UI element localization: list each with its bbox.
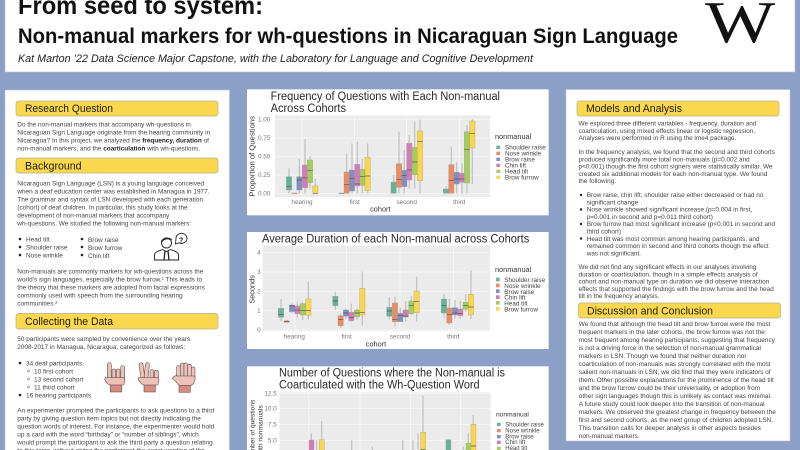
legend: Brow raise (505, 156, 535, 163)
list: findings: significant change (587, 199, 639, 206)
chart title: Frequency of Questions with Each Non-manual (271, 89, 500, 103)
heading: research question (16, 101, 218, 116)
text: discussion (579, 321, 776, 440)
x axis: first (350, 199, 360, 206)
y axis: 4 (257, 249, 261, 256)
text: frequency analysis: the following: (578, 178, 616, 185)
list: non-manual markers: Brow furrow (88, 245, 123, 252)
list: non-manual markers: Shoulder raise (26, 244, 68, 252)
text: interaction effects: cohort and non-manual type on duration we did observe interaction (578, 279, 770, 286)
heading: collecting the data (16, 314, 218, 329)
panel: left column (5, 90, 230, 450)
icon: hand two (138, 362, 159, 392)
icon: hand three (172, 363, 195, 392)
y axis: 1.00 (258, 117, 271, 124)
text: procedure (16, 408, 215, 450)
legend: nonmanual (496, 411, 529, 418)
text: research question: Do the non-manual markers that accompany wh-questions in (17, 122, 191, 128)
text: frequency analysis: created six additional models for each non-manual type. We found (578, 171, 768, 178)
legend (495, 265, 546, 314)
y axis (264, 390, 277, 444)
text: research question: non-manual markers, and the coarticulation with wh-questions. (17, 146, 200, 152)
legend: Chin lift (505, 162, 526, 169)
x axis title: cohort (370, 204, 391, 213)
text: models intro (578, 120, 757, 142)
heading: models and analysis: Models and Analysis (586, 103, 682, 115)
y axis title: Seconds (248, 275, 257, 304)
plot area (275, 115, 490, 197)
chart: frequency boxplot (247, 89, 549, 215)
legend: Chin lift (505, 440, 526, 446)
text: background: when a deaf education center was established in Managua in 1977. (16, 188, 210, 196)
list: non-manual markers: Chin lift (88, 253, 110, 260)
text: interaction effects: tilt in the frequency analysis. (578, 293, 660, 300)
y axis: 1 (257, 308, 261, 315)
x axis: first (342, 333, 352, 340)
text: procedure: would prompt the participant to ask the third party a question relating (16, 440, 213, 446)
y axis title: Proportion of Questions (247, 116, 256, 197)
text: discussion: frequent markers in the later cohorts, the brow furrow was not the (579, 329, 765, 336)
legend: Nose wrinkle (504, 283, 541, 290)
y axis (257, 249, 261, 334)
text: discussion: and the brow furrow could be their universality, or adoption from (579, 385, 760, 392)
chart title (271, 89, 500, 115)
list: non-manual markers: Brow raise (88, 237, 119, 244)
text: discussion: salient non-manuals in LSN, we did find that they were indicators of (579, 369, 771, 376)
text: research question: Nicaraguan Sign Language originate from the hearing community in (17, 130, 211, 136)
legend: Nose wrinkle (505, 150, 542, 157)
panel: right column (566, 90, 790, 441)
text: procedure: party by giving question item topics but not directly indicating the (17, 416, 201, 422)
chart: duration boxplot (247, 231, 549, 349)
x axis (291, 199, 466, 206)
legend (495, 132, 546, 181)
chart title: Across Cohorts (271, 101, 346, 115)
list: participant breakdown: 11 third cohort (34, 384, 75, 392)
legend: Head tilt (505, 168, 528, 175)
legend: Shoulder raise (504, 277, 546, 284)
list: findings: Nose wrinkle showed significant increase (p=0.004 in first, (587, 207, 752, 214)
text: discussion: most frequent among hearing participants, suggesting that frequency (579, 337, 776, 344)
heading: models and analysis (577, 101, 779, 116)
text: discussion: markers in LSN. Though we found that neither duration nor (579, 353, 747, 360)
list: findings: was not significant. (586, 250, 641, 257)
text: background: wh-questions. We studied the following non-manual markers: (16, 220, 191, 228)
legend: Brow furrow (505, 174, 539, 181)
legend: Chin lift (504, 295, 526, 302)
y axis: 2 (257, 288, 261, 295)
text: discussion: This transition calls for deeper analysis in other aspects besides (579, 425, 761, 432)
y axis: 10.0 (264, 406, 277, 413)
y axis: 12.5 (264, 390, 277, 397)
chart title: Average Duration of each Non-manual across Cohorts (262, 231, 529, 245)
y axis: 5.0 (268, 437, 277, 444)
y axis: 0.00 (258, 190, 271, 197)
text: non-manuals: world’s sign languages, especially the brow furrow.¹ This leads to (16, 276, 202, 284)
heading: collecting the data: Collecting the Data (25, 316, 113, 328)
text: non-manuals: Non-manuals are commonly markers for wh-questions across the (17, 268, 204, 276)
plot area (279, 392, 491, 450)
legend: Brow furrow (504, 307, 538, 314)
text: discussion: non-manual markers. (579, 433, 640, 440)
text: frequency analysis (578, 149, 775, 185)
icon: person with question bubble (154, 233, 187, 260)
text: participants: 50 participants were sampled by convenience over the years (17, 336, 190, 343)
chart title: Number of Questions where the Non-manual is (279, 365, 505, 379)
text: discussion: We found that although the head tilt and brow furrow were the most (579, 321, 771, 328)
list: findings: Brow furrow had most significant increase (p<0.001 in second and (587, 221, 776, 228)
list: findings (580, 192, 776, 257)
text: discussion: coarticulation of non-manuals was strongly correlated with the most (579, 361, 771, 368)
x axis: hearing (284, 333, 305, 340)
y axis: 0.25 (258, 172, 271, 179)
subtitle: Non-manual markers for wh-questions in Nicaraguan Sign Language (18, 25, 678, 48)
y axis: 7.5 (268, 421, 277, 428)
text: frequency analysis: In the frequency analysis, we found that the second and third cohorts (578, 149, 775, 156)
icon: person with question bubble: ? (179, 236, 184, 244)
text: discussion: A future study could look deeper into the transition of non-manual (579, 401, 765, 408)
list: non-manual markers (19, 236, 123, 260)
x axis: second (396, 199, 417, 206)
list: findings: Brow raise, chin lift, shoulder raise either decreased or had no (587, 192, 764, 199)
text: models intro: coarticulation, using mixed effects linear or logistic regression. (578, 128, 755, 135)
x axis title: cohort (366, 339, 386, 348)
text: discussion: markers. We observed the greatest change in frequency between the (579, 409, 776, 416)
text: models intro: Analyses were performed in R using the lme4 package. (578, 135, 737, 142)
text: research question (17, 122, 211, 152)
text: models intro: We explored three different variables - frequency, duration and (578, 120, 757, 128)
text: non-manuals: the theory that these markers are adopted from facial expressions (17, 284, 205, 292)
text: interaction effects (578, 264, 774, 300)
heading: research question: Research Question (25, 103, 113, 115)
heading: discussion and conclusion (578, 303, 780, 318)
text: discussion: is not a driving force in the selection of non-manual grammatical (579, 345, 761, 352)
legend: nonmanual (495, 265, 532, 274)
text: background: (cohort) of deaf children. In particular, this study looks at the (17, 204, 188, 212)
x axis: second (390, 333, 411, 340)
text: background: Nicaraguan Sign Language (LSN) is a young language conceived (17, 180, 205, 188)
legend: Shoulder raise (505, 422, 545, 428)
text: research question: Nicaragua? In this project, we analyzed the frequency, duration of (17, 138, 209, 144)
heading: background (16, 158, 218, 173)
list: participant breakdown: 10 first cohort (34, 368, 73, 376)
header banner (5, 0, 795, 72)
list: non-manual markers: Head tilt (26, 236, 50, 244)
author line: Kat Marton ’22 Data Science Major Capstone, with the Laboratory for Language and Cognitive Development (18, 53, 534, 65)
list: participant breakdown (19, 360, 91, 400)
plot area (263, 246, 490, 331)
text: participants: 2008-2017 in Managua, Nicaragua, categorized as follows: (17, 344, 185, 351)
text: frequency analysis: p<0.001) though the first cohort signers were statistically similar. We (578, 164, 773, 171)
y axis title (250, 399, 265, 450)
x axis (284, 333, 460, 340)
text: non-manuals (16, 268, 205, 308)
text: discussion: them. Other possible explanations for the prominence of the head tilt (579, 377, 774, 384)
chart title: Coarticulated with the Wh-Question Word (279, 377, 480, 391)
heading: background: Background (25, 160, 82, 172)
text: background: The grammar and syntax of LSN developed with each generation (17, 196, 203, 204)
legend: nonmanual (495, 132, 532, 141)
x axis: third (453, 199, 466, 206)
text: procedure: question words of interest. For instance, the experimenter would hold (17, 424, 215, 430)
y axis: 0 (257, 327, 261, 334)
text: non-manuals: commonly used with speech from the surrounding hearing (17, 292, 183, 300)
legend: Brow raise (504, 289, 535, 296)
text: background: development of non-manual markers that accompany (17, 212, 170, 220)
text: procedure: An experimenter prompted the participants to ask questions to a third (17, 408, 215, 414)
list: findings: third cohort) (587, 228, 621, 236)
list: participant breakdown: 16 hearing participants (26, 392, 91, 400)
text: background (16, 180, 210, 228)
x axis: hearing (291, 199, 313, 206)
list: findings: Head tilt was most common among hearing participants, and (587, 236, 760, 243)
list: participant breakdown: 13 second cohort (34, 376, 84, 384)
text: discussion: first and second cohorts, as the next group of children adopted LSN. (579, 417, 773, 424)
y axis: 0.50 (258, 153, 271, 160)
chart title (279, 365, 505, 391)
text: non-manuals: communities.² (17, 300, 58, 308)
text: interaction effects: duration or coarticulation, though in a simple effects analysis of (578, 271, 758, 278)
text: interaction effects: effects that supported the findings with the brow furrow and the head (578, 286, 774, 293)
heading: discussion and conclusion: Discussion and Conclusion (587, 306, 713, 318)
legend: Nose wrinkle (505, 429, 540, 435)
icon: hand one (105, 363, 125, 392)
text: discussion: other sign languages though this is unlikely as contact was minimal. (579, 393, 772, 400)
text: interaction effects: We did not find any significant effects in our analyses involving (578, 264, 757, 271)
icon: three hand signs (105, 362, 195, 392)
text: procedure: up a card with the word “birthday” or “number of siblings”, which (17, 432, 199, 438)
list: participant breakdown: 34 deaf participants: (26, 360, 84, 368)
chart: coarticulation boxplot (247, 365, 549, 450)
list: findings: p=0.001 in second and p=0.011 third cohort) (587, 214, 713, 221)
legend: Brow raise (505, 435, 534, 441)
list: non-manual markers: Nose wrinkle (26, 252, 63, 260)
legend (496, 411, 545, 450)
x axis: third (447, 333, 460, 340)
y axis: 3 (257, 269, 261, 276)
legend: Shoulder raise (505, 144, 546, 151)
list: findings: remained common in second and third cohorts though the effect (587, 243, 769, 250)
y axis (258, 117, 271, 197)
text: frequency analysis: produced significantly more total non-manuals (p=0.002 and (578, 156, 750, 163)
y axis: 0.75 (258, 135, 271, 142)
text: participants (17, 336, 190, 351)
legend: Head tilt (504, 301, 528, 308)
